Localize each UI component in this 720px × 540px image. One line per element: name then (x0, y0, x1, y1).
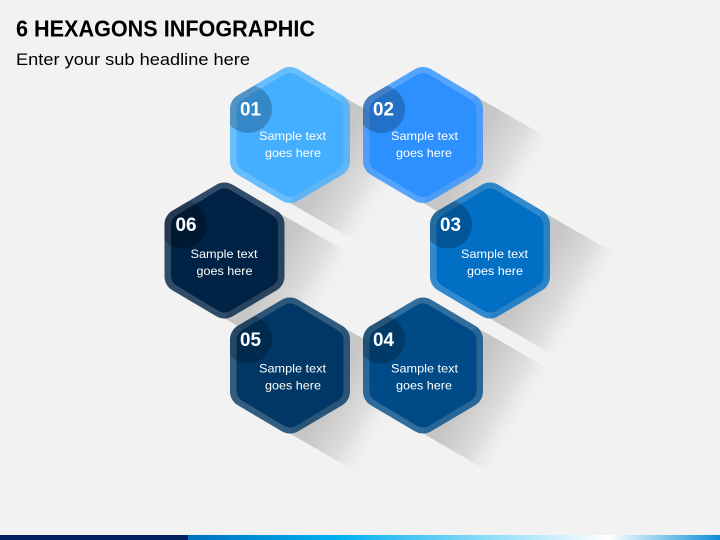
number 05: 05 (240, 330, 261, 351)
label 01 line 1: Sample text (259, 129, 327, 143)
number 02: 02 (373, 100, 394, 120)
hexagon 04 (357, 297, 483, 434)
number 06: 06 (176, 215, 196, 236)
label 05 line 1: Sample text (259, 362, 327, 376)
hexagon 02 (357, 67, 483, 203)
number badge 02 (363, 86, 405, 133)
label 03 line 2: goes here (467, 264, 523, 278)
hexagon 06 (158, 182, 284, 319)
number 03: 03 (440, 215, 461, 236)
number badge 01 (230, 86, 272, 133)
number 04: 04 (373, 330, 394, 351)
label 01 line 2: goes here (265, 146, 321, 160)
label 06 line 2: goes here (196, 264, 253, 278)
number 01: 01 (240, 100, 261, 120)
hexagon 01 (224, 67, 350, 203)
number badge 04 (363, 316, 405, 364)
label 05 line 2: goes here (265, 378, 321, 392)
title: 6 HEXAGONS INFOGRAPHIC (16, 16, 315, 42)
hexagon 05 (224, 297, 350, 434)
label 04 line 2: goes here (396, 378, 452, 392)
long diagonal shadows (224, 96, 622, 478)
label 02 line 2: goes here (396, 146, 452, 160)
label 03 line 1: Sample text (461, 247, 529, 261)
label 02 line 1: Sample text (391, 129, 459, 143)
number badge 06 (164, 201, 206, 248)
number badge 05 (230, 316, 272, 364)
sub headline: Enter your sub headline here (16, 50, 250, 69)
label 06 line 1: Sample text (190, 247, 258, 261)
number badge 03 (430, 201, 472, 248)
hexagon 03 (424, 182, 550, 319)
footer bar (0, 535, 720, 540)
label 04 line 1: Sample text (391, 362, 459, 376)
